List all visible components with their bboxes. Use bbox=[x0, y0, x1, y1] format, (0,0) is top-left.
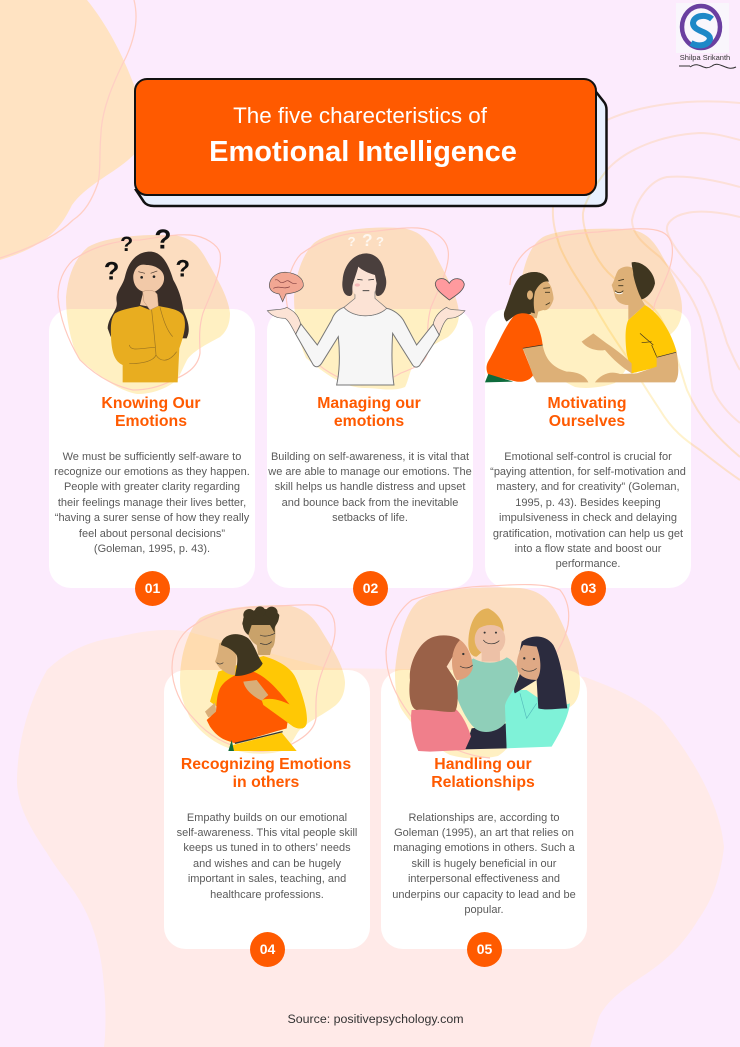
brain bbox=[269, 272, 303, 302]
icon: two people talking bbox=[485, 262, 678, 382]
body text: impulsiveness in check and delaying bbox=[499, 512, 677, 524]
left hand bbox=[267, 307, 301, 334]
icon: hugging couple bbox=[205, 606, 307, 751]
faded question marks: ? bbox=[376, 234, 384, 249]
body text: healthcare professions. bbox=[210, 889, 324, 901]
body text: performance. bbox=[556, 558, 620, 570]
heading: Ourselves bbox=[549, 413, 625, 430]
outline: motivating bbox=[510, 229, 672, 330]
title banner back plate bbox=[134, 91, 608, 208]
heading: Emotions bbox=[115, 413, 187, 430]
heading: in others bbox=[233, 774, 299, 791]
heading: Managing our bbox=[317, 395, 421, 412]
card 5: Handling our Relationships bbox=[381, 670, 587, 949]
body text: managing emotions in others. Such a bbox=[393, 842, 575, 854]
title line one: The five charecteristics of bbox=[233, 103, 487, 128]
heading bbox=[101, 395, 201, 430]
number badge bbox=[250, 932, 285, 967]
heading bbox=[317, 395, 421, 430]
body text: interpersonal effectiveness and bbox=[408, 873, 560, 885]
body text: (Goleman, 1995, p. 43). bbox=[94, 543, 210, 555]
blob: managing bbox=[294, 228, 459, 390]
number badge bbox=[353, 571, 388, 606]
body text: 1995, p. 43). Besides keeping bbox=[515, 497, 661, 509]
heading bbox=[181, 756, 351, 791]
contour lines bbox=[553, 101, 740, 480]
body text: and wishes and can be hugely bbox=[193, 858, 341, 870]
title line two: Emotional Intelligence bbox=[209, 136, 517, 168]
blob: handling bbox=[395, 587, 580, 759]
body text: self-awareness. This vital people skill bbox=[177, 827, 357, 839]
body text: keeps us tuned in to others’ needs bbox=[183, 842, 351, 854]
body text bbox=[177, 812, 357, 901]
number badge: 02 bbox=[363, 580, 378, 596]
body text bbox=[392, 812, 576, 916]
body text: important in sales, teaching, and bbox=[188, 873, 346, 885]
blob: motivating bbox=[520, 229, 682, 388]
body text bbox=[54, 451, 250, 555]
heading bbox=[548, 395, 626, 430]
question marks: ? bbox=[175, 256, 190, 283]
card 1: Knowing Our Emotions bbox=[49, 309, 255, 588]
question marks: ? bbox=[104, 257, 119, 285]
number badge bbox=[135, 571, 170, 606]
logo bbox=[676, 3, 736, 69]
number badge: 04 bbox=[260, 941, 275, 957]
logo: Shilpa Srikanth bbox=[680, 53, 730, 62]
faded question marks: ? bbox=[348, 234, 356, 249]
question marks: ? bbox=[154, 224, 172, 255]
body text: their feelings manage their lives better, bbox=[58, 497, 246, 509]
outline: knowing bbox=[58, 235, 220, 390]
number badge: 05 bbox=[477, 941, 492, 957]
number badge bbox=[571, 571, 606, 606]
body text: People with greater clarity regarding bbox=[64, 481, 240, 493]
heading: Knowing Our bbox=[101, 395, 201, 412]
body text: popular. bbox=[464, 904, 504, 916]
body text: “having a surer sense of how they really bbox=[55, 512, 249, 524]
number badge bbox=[467, 932, 502, 967]
body text: skill helps us handle distress and upset bbox=[275, 481, 465, 493]
card 2: Managing our emotions bbox=[267, 309, 473, 588]
card 4: Recognizing Emotions in others bbox=[164, 670, 370, 949]
body text: skill is hugely beneficial in our bbox=[412, 858, 556, 870]
body text bbox=[268, 451, 472, 524]
faded question marks: ? bbox=[362, 230, 373, 250]
card 3: Motivating Ourselves bbox=[485, 309, 691, 588]
body text: “paying attention, for self-motivation and bbox=[490, 466, 686, 478]
body text: mastery, and for creativity” (Goleman, bbox=[496, 481, 680, 493]
body text: and bounce back from the inevitable bbox=[282, 497, 458, 509]
body text: Relationships are, according to bbox=[408, 812, 560, 824]
body text: Emotional self-control is crucial for bbox=[504, 451, 672, 463]
heading: Handling our bbox=[434, 756, 532, 773]
heading bbox=[431, 756, 535, 791]
heading: Recognizing Emotions bbox=[181, 756, 351, 773]
title banner front bbox=[134, 78, 597, 196]
question marks: ? bbox=[120, 232, 133, 256]
right hand bbox=[433, 307, 465, 335]
faded question marks bbox=[348, 230, 384, 250]
body text: Building on self-awareness, it is vital that bbox=[271, 451, 469, 463]
icon: woman balancing brain and heart bbox=[267, 230, 465, 385]
blob: knowing bbox=[66, 235, 230, 394]
heading: Motivating bbox=[548, 395, 626, 412]
number badge: 03 bbox=[581, 580, 596, 596]
question marks bbox=[104, 224, 190, 285]
outline: managing bbox=[286, 228, 448, 385]
body text: feel about personal decisions” bbox=[79, 528, 225, 540]
body text: Empathy builds on our emotional bbox=[187, 812, 347, 824]
heading: emotions bbox=[334, 413, 404, 430]
heading: Relationships bbox=[431, 774, 535, 791]
body text: underpins our capacity to lead and be bbox=[392, 889, 576, 901]
body text bbox=[490, 451, 686, 570]
blob: recognizing bbox=[180, 605, 345, 754]
body text: recognize our emotions as they happen. bbox=[54, 466, 250, 478]
body text: We must be sufficiently self-aware to bbox=[63, 451, 241, 463]
heart bbox=[435, 279, 464, 300]
outline: recognizing bbox=[172, 605, 335, 751]
body text: setbacks of life. bbox=[332, 512, 408, 524]
icon: three friends bbox=[409, 608, 570, 752]
body text: Goleman (1995), an art that relies on bbox=[394, 827, 574, 839]
outline: handling bbox=[386, 585, 569, 758]
body text: into a flow state and boost our bbox=[515, 543, 661, 555]
source line: Source: positivepsychology.com bbox=[287, 1012, 464, 1026]
number badge: 01 bbox=[145, 580, 160, 596]
icon: thinking woman bbox=[104, 224, 190, 382]
body text: we are able to manage our emotions. The bbox=[268, 466, 472, 478]
title banner bbox=[134, 78, 608, 208]
body text: gratification, motivation can help us get bbox=[493, 528, 683, 540]
